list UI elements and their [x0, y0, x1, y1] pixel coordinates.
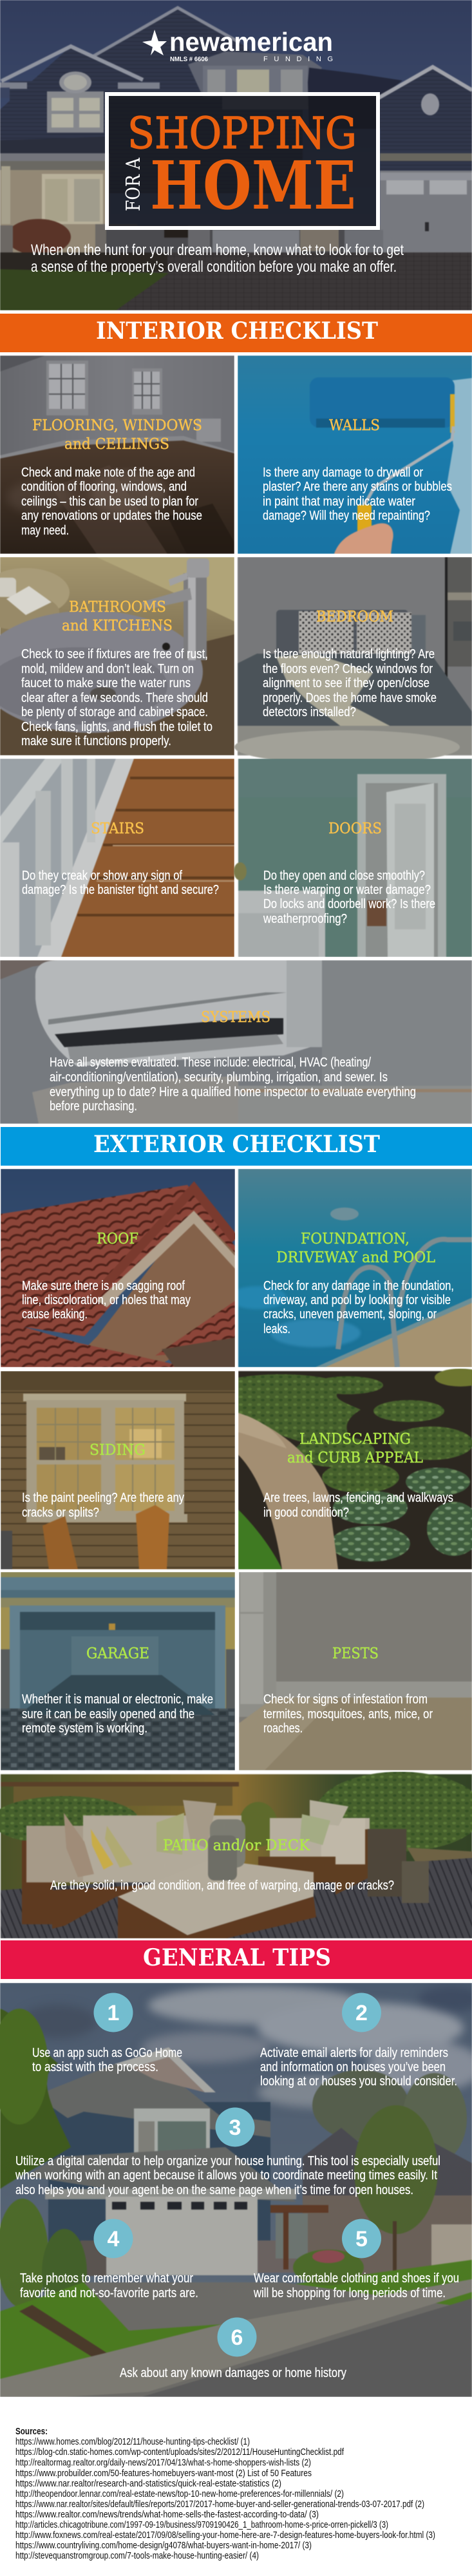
panel: systems — [0, 960, 472, 1124]
heading: WALLS — [329, 416, 380, 434]
panel: siding — [1, 1371, 235, 1569]
body text — [21, 647, 212, 748]
body text: in paint that may indicate water — [263, 495, 415, 509]
body text — [263, 869, 435, 926]
tip 6: Ask about any known damages or home history — [120, 2366, 346, 2380]
body text: Do locks and doorbell work? Is there — [263, 897, 435, 911]
title: home: HOME — [150, 147, 356, 225]
body text: damage? Will they need repainting? — [263, 509, 430, 523]
photo: swimming pool — [238, 1169, 472, 1367]
photo: patio furniture — [0, 1772, 472, 1938]
body text: Do they open and close smoothly? — [263, 869, 425, 883]
body text: detectors installed? — [263, 705, 356, 719]
sources list: https://www.homes.com/blog/2012/11/house-hunting-tips-checklist/ (1) — [15, 2437, 250, 2447]
tip 3 — [15, 2107, 440, 2197]
body text — [21, 466, 202, 538]
body text: clear after a few seconds. There should — [21, 691, 208, 705]
body text: remote system is working. — [22, 1721, 147, 1736]
tip 2 — [260, 1993, 457, 2088]
heading: FOUNDATION, — [301, 1229, 410, 1247]
body text: mold, mildew and don’t leak. Turn on — [21, 662, 194, 676]
photo: clay tile roof — [1, 1169, 235, 1367]
heading: PATIO and/or DECK — [163, 1836, 310, 1854]
body text: condition of flooring, windows, and — [21, 480, 187, 494]
photo: suburban house under cloudy sky — [0, 1983, 472, 2397]
heading: FLOORING, WINDOWS — [32, 416, 202, 434]
body text: Are they solid, in good condition, and free of warping, damage or cracks? — [50, 1879, 394, 1893]
body text — [263, 1279, 454, 1336]
body text: Have all systems evaluated. These include: electrical, HVAC (heating/ — [50, 1056, 371, 1070]
panel: bathrooms and kitchens — [0, 557, 234, 755]
heading: SYSTEMS — [201, 1008, 270, 1026]
body text: Check to see if fixtures are free of rust, — [21, 647, 208, 661]
photo: air conditioner — [0, 960, 472, 1124]
panel: pests — [239, 1572, 472, 1770]
body text: line, discoloration, or holes that may — [22, 1293, 191, 1307]
body text: may need. — [21, 524, 69, 538]
sources list: https://blog-cdn.static-homes.com/wp-content/uploads/sites/2/2012/11/HouseHuntingChecklist.pdf — [15, 2447, 345, 2458]
heading — [276, 1229, 435, 1266]
body text: leaks. — [263, 1322, 290, 1336]
body text: the floors even? Check windows for — [263, 662, 433, 676]
body text: termites, mosquitoes, ants, mice, or — [263, 1707, 433, 1721]
body text: Is there any damage to drywall or — [263, 466, 423, 480]
photo: empty room with light floor — [239, 1572, 472, 1770]
panel: stairs — [0, 759, 234, 957]
body text: air-conditioning/ventilation), security, plumbing, irrigation, and sewer. Is — [50, 1070, 388, 1084]
panel: patio and deck — [0, 1772, 472, 1938]
logo: newamerican — [169, 27, 333, 57]
body text: properly. Does the home have smoke — [263, 691, 437, 705]
banner: interior checklist — [0, 314, 472, 352]
photo: wooden staircase — [0, 759, 234, 957]
photo: empty room — [0, 355, 234, 554]
body text: Make sure there is no sagging roof — [22, 1279, 185, 1293]
logo — [142, 27, 333, 63]
body text — [263, 466, 452, 523]
sources — [15, 2427, 435, 2561]
body text: before purchasing. — [50, 1099, 137, 1113]
tip 5: 5 — [355, 2227, 368, 2251]
intro text — [31, 242, 404, 276]
photo: open garage — [1, 1572, 235, 1770]
heading: and CURB APPEAL — [287, 1448, 423, 1466]
title box — [107, 94, 378, 228]
body text: Check and make note of the age and — [21, 466, 195, 480]
body text: faucet to make sure the water runs — [21, 676, 191, 690]
photo: sink and faucet — [0, 557, 234, 755]
tip 5 — [253, 2219, 459, 2300]
heading: DOORS — [328, 819, 382, 837]
banner: exterior checklist — [1, 1127, 472, 1166]
banner: general tips — [1, 1940, 472, 1979]
panel: walls — [238, 355, 472, 554]
heading: LANDSCAPING — [299, 1430, 411, 1448]
heading — [62, 598, 173, 634]
tip 4: 4 — [108, 2227, 120, 2251]
body text: in good condition? — [263, 1506, 349, 1520]
body text: Is the paint peeling? Are there any — [22, 1491, 184, 1505]
title: for a: FOR A — [122, 158, 145, 211]
body text: Do they creak or show any sign of — [22, 869, 182, 883]
sources list: http://realtormag.realtor.org/daily-news/2017/04/13/what-s-home-shoppers-wish-lists (2) — [15, 2458, 311, 2468]
body text — [22, 1692, 213, 1736]
body text: sure it can be easily opened and the — [22, 1707, 194, 1721]
heading: BATHROOMS — [69, 598, 166, 616]
panel: general tips — [0, 1983, 472, 2397]
banner: general tips: GENERAL TIPS — [143, 1944, 331, 1971]
body text: any renovations or updates the house — [21, 509, 202, 523]
sources list: http://articles.chicagotribune.com/1997-09-19/business/9709190426_1_bathroom-home-s-price-orren-pickell/3 (3) — [15, 2520, 388, 2530]
tip 4: Take photos to remember what your — [20, 2271, 193, 2286]
logo: NMLS # 6606 — [170, 55, 208, 63]
tip 3: 3 — [229, 2116, 241, 2140]
body text: cracks, uneven pavement, sloping, or — [263, 1307, 437, 1321]
body text: alignment to see if they open/close — [263, 676, 430, 690]
sources list: https://www.nar.realtor/research-and-statistics/quick-real-estate-statistics (2) — [15, 2479, 281, 2489]
body text — [50, 1056, 416, 1113]
photo: bed with pillows — [234, 557, 472, 759]
photo: paint roller — [238, 355, 472, 554]
tip 4: favorite and not-so-favorite parts are. — [20, 2286, 198, 2300]
body text: make sure it functions properly. — [21, 734, 171, 748]
heading: STAIRS — [91, 819, 144, 837]
heading: GARAGE — [86, 1644, 149, 1662]
hero section — [0, 0, 472, 310]
heading: ROOF — [97, 1229, 138, 1247]
body text — [22, 1491, 184, 1520]
body text: Check for signs of infestation from — [263, 1692, 428, 1707]
heading: BEDROOM — [316, 607, 393, 625]
tip 6: 6 — [231, 2325, 243, 2350]
panel: roof — [1, 1169, 235, 1367]
body text — [22, 1279, 191, 1321]
panel: garage — [1, 1572, 235, 1770]
photo: porch window and chairs — [1, 1371, 235, 1569]
body text — [263, 647, 437, 719]
heading — [287, 1430, 423, 1466]
heading: DRIVEWAY and POOL — [276, 1248, 435, 1266]
hero photo: house at dusk — [0, 0, 472, 310]
body text: cause leaking. — [22, 1307, 88, 1321]
body text — [22, 869, 219, 897]
heading: and KITCHENS — [62, 616, 173, 634]
tip 1 — [32, 1993, 182, 2074]
sources list: https://www.realtor.com/news/trends/what-home-sells-the-fastest-according-to-data/ (3) — [15, 2510, 319, 2520]
heading: and CEILINGS — [64, 435, 169, 453]
heading: SIDING — [90, 1441, 146, 1459]
photo: garden with stone wall — [238, 1368, 472, 1569]
body text: be plenty of storage and cabinet space. — [21, 705, 208, 719]
tip 4 — [20, 2219, 198, 2300]
body text: ceilings – this can be used to plan for — [21, 495, 198, 509]
panel: doors — [234, 759, 472, 957]
body text: weatherproofing? — [263, 912, 347, 926]
body text: cracks or splits? — [22, 1506, 99, 1520]
body text: Check fans, lights, and flush the toilet to — [21, 720, 212, 734]
banner: interior checklist: INTERIOR CHECKLIST — [96, 317, 378, 345]
banner: exterior checklist: EXTERIOR CHECKLIST — [93, 1131, 380, 1158]
sources heading: Sources: — [15, 2427, 48, 2437]
tip 1: Use an app such as GoGo Home — [32, 2046, 182, 2060]
tip 1: 1 — [108, 2001, 119, 2025]
body text: roaches. — [263, 1721, 303, 1736]
sources list: https://www.countryliving.com/home-design/g4078/what-buyers-want-in-home-2017/ (3) — [15, 2541, 312, 2551]
panel: bedroom — [234, 557, 472, 764]
sources list: https://www.probuilder.com/50-features-homebuyers-want-most (2) List of 50 Features — [15, 2468, 312, 2479]
title: shopping: SHOPPING — [127, 108, 357, 158]
sources list: http://stevequanstromgroup.com/7-tools-make-house-hunting-easier/ (4) — [15, 2551, 259, 2561]
body text — [263, 1692, 433, 1736]
sources list: http://theopendoor.lennar.com/real-estate-news/top-10-new-home-preferences-for-millennials/ (2) — [15, 2489, 344, 2499]
panel: flooring, windows and ceilings — [0, 355, 234, 554]
body text: Is there enough natural lighting? Are — [263, 647, 435, 661]
tip 1: to assist with the process. — [32, 2060, 158, 2074]
panel: landscaping and curb appeal — [238, 1368, 472, 1569]
body text — [263, 1491, 453, 1520]
heading: PESTS — [332, 1644, 379, 1662]
body text: Whether it is manual or electronic, make — [22, 1692, 213, 1707]
heading — [32, 416, 202, 453]
tip 2: 2 — [355, 2001, 368, 2025]
logo: FUNDING — [263, 55, 333, 63]
photo: green room with door — [234, 759, 472, 957]
body text: damage? Is the banister tight and secure? — [22, 883, 219, 897]
body text: Is there warping or water damage? — [263, 883, 431, 897]
panel: foundation, driveway and pool — [229, 1169, 472, 1367]
tip 6 — [120, 2317, 346, 2380]
sources list — [15, 2437, 435, 2561]
